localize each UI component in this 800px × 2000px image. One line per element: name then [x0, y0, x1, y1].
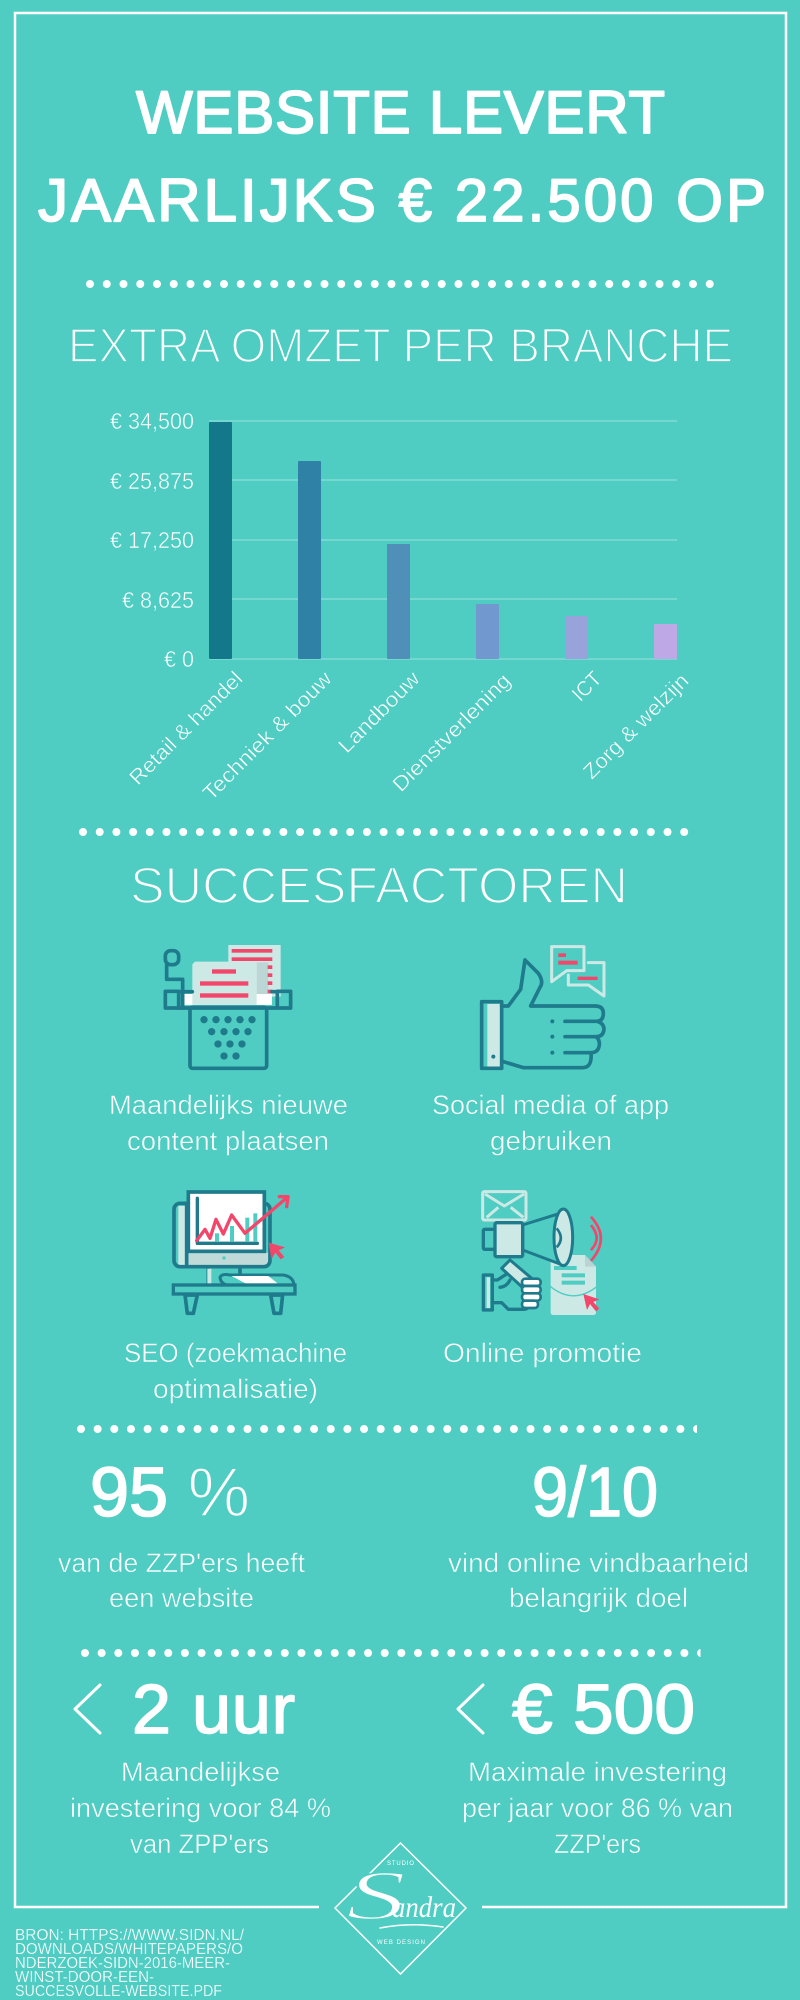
- bars: [209, 422, 677, 659]
- bar chart: extra omzet per branche: [110, 408, 694, 805]
- title: JAARLIJKS € 22.500 OP: [38, 167, 766, 234]
- stat: less than 2 uur: 2 uur: [132, 1670, 295, 1748]
- heading: succesfactoren: SUCCESFACTOREN: [130, 857, 628, 914]
- caption: social media: Social media of app: [432, 1090, 669, 1120]
- caption: social media: gebruiken: [490, 1126, 612, 1156]
- caption: online promotie: Online promotie: [443, 1338, 642, 1368]
- source text: NDERZOEK-SIDN-2016-MEER-: [15, 1955, 230, 1972]
- stat: less than 500 euro: per jaar voor 86 % van: [462, 1793, 733, 1823]
- caption: content: [109, 1090, 348, 1156]
- logo: Studio Sandra web design: S: [346, 1858, 406, 1935]
- y axis labels: € 25,875: [110, 468, 194, 494]
- stat: 95 %: van de ZZP'ers heeft: [58, 1548, 305, 1578]
- category labels: Retail & handel: [125, 667, 248, 790]
- stat: less than 500 euro: Maximale investering: [468, 1757, 727, 1787]
- source text: [15, 1927, 245, 2000]
- category labels: Dienstverlening: [388, 669, 516, 797]
- icon: thumbs up with chat bubbles: [482, 947, 604, 1068]
- source text: DOWNLOADS/WHITEPAPERS/O: [15, 1941, 243, 1958]
- y axis labels: € 34,500: [110, 408, 194, 434]
- source text: SUCCESVOLLE-WEBSITE.PDF: [15, 1983, 222, 2000]
- stat: 9/10: 9/10: [532, 1453, 658, 1531]
- stat: 9/10: vind online vindbaarheid: [448, 1548, 749, 1578]
- heading: extra omzet per branche: EXTRA OMZET PER BRANCHE: [68, 320, 733, 373]
- source text: BRON: HTTPS://WWW.SIDN.NL/: [15, 1927, 245, 1944]
- stat: 9/10: [448, 1453, 749, 1613]
- stat: less than 500 euro: [458, 1670, 733, 1859]
- caption: SEO: [124, 1338, 347, 1404]
- category labels: Techniek & bouw: [199, 667, 337, 805]
- title: WEBSITE LEVERT: [136, 79, 665, 146]
- category labels: Zorg & welzijn: [579, 669, 694, 784]
- y axis labels: [110, 408, 194, 672]
- logo: Studio Sandra web design: STUDIO: [387, 1861, 414, 1867]
- y axis labels: € 17,250: [110, 527, 194, 553]
- caption: SEO: optimalisatie): [153, 1374, 318, 1404]
- stat: 9/10: belangrijk doel: [509, 1583, 688, 1613]
- icon: computer with rising chart: [173, 1192, 295, 1313]
- source text: WINST-DOOR-EEN-: [15, 1969, 154, 1986]
- y axis labels: € 0: [164, 646, 194, 672]
- icon: megaphone with mail and document: [483, 1192, 603, 1315]
- title: [38, 79, 766, 234]
- stat: 95 %: 95 %: [90, 1453, 250, 1531]
- y axis labels: € 8,625: [122, 587, 194, 613]
- stat: less than 2 uur: [70, 1670, 331, 1859]
- stat: less than 500 euro: € 500: [512, 1670, 695, 1748]
- logo: Studio Sandra web design: andra: [392, 1891, 456, 1924]
- caption: content: Maandelijks nieuwe: [109, 1090, 348, 1120]
- icon: typewriter: [165, 945, 291, 1068]
- category labels: [125, 667, 694, 805]
- category labels: Landbouw: [334, 667, 425, 758]
- stat: 95 %: [58, 1453, 305, 1613]
- caption: social media: [432, 1090, 669, 1156]
- stat: less than 2 uur: Maandelijkse: [121, 1757, 280, 1787]
- stat: less than 500 euro: ZZP'ers: [554, 1829, 641, 1859]
- stat: less than 2 uur: van ZPP'ers: [130, 1829, 269, 1859]
- caption: SEO: SEO (zoekmachine: [124, 1338, 347, 1368]
- caption: content: content plaatsen: [127, 1126, 329, 1156]
- logo: Studio Sandra web design: WEB DESIGN: [377, 1940, 425, 1946]
- logo: Studio Sandra web design: [335, 1843, 466, 1974]
- stat: 95 %: een website: [109, 1583, 254, 1613]
- category labels: ICT: [568, 667, 607, 706]
- stat: less than 2 uur: investering voor 84 %: [70, 1793, 331, 1823]
